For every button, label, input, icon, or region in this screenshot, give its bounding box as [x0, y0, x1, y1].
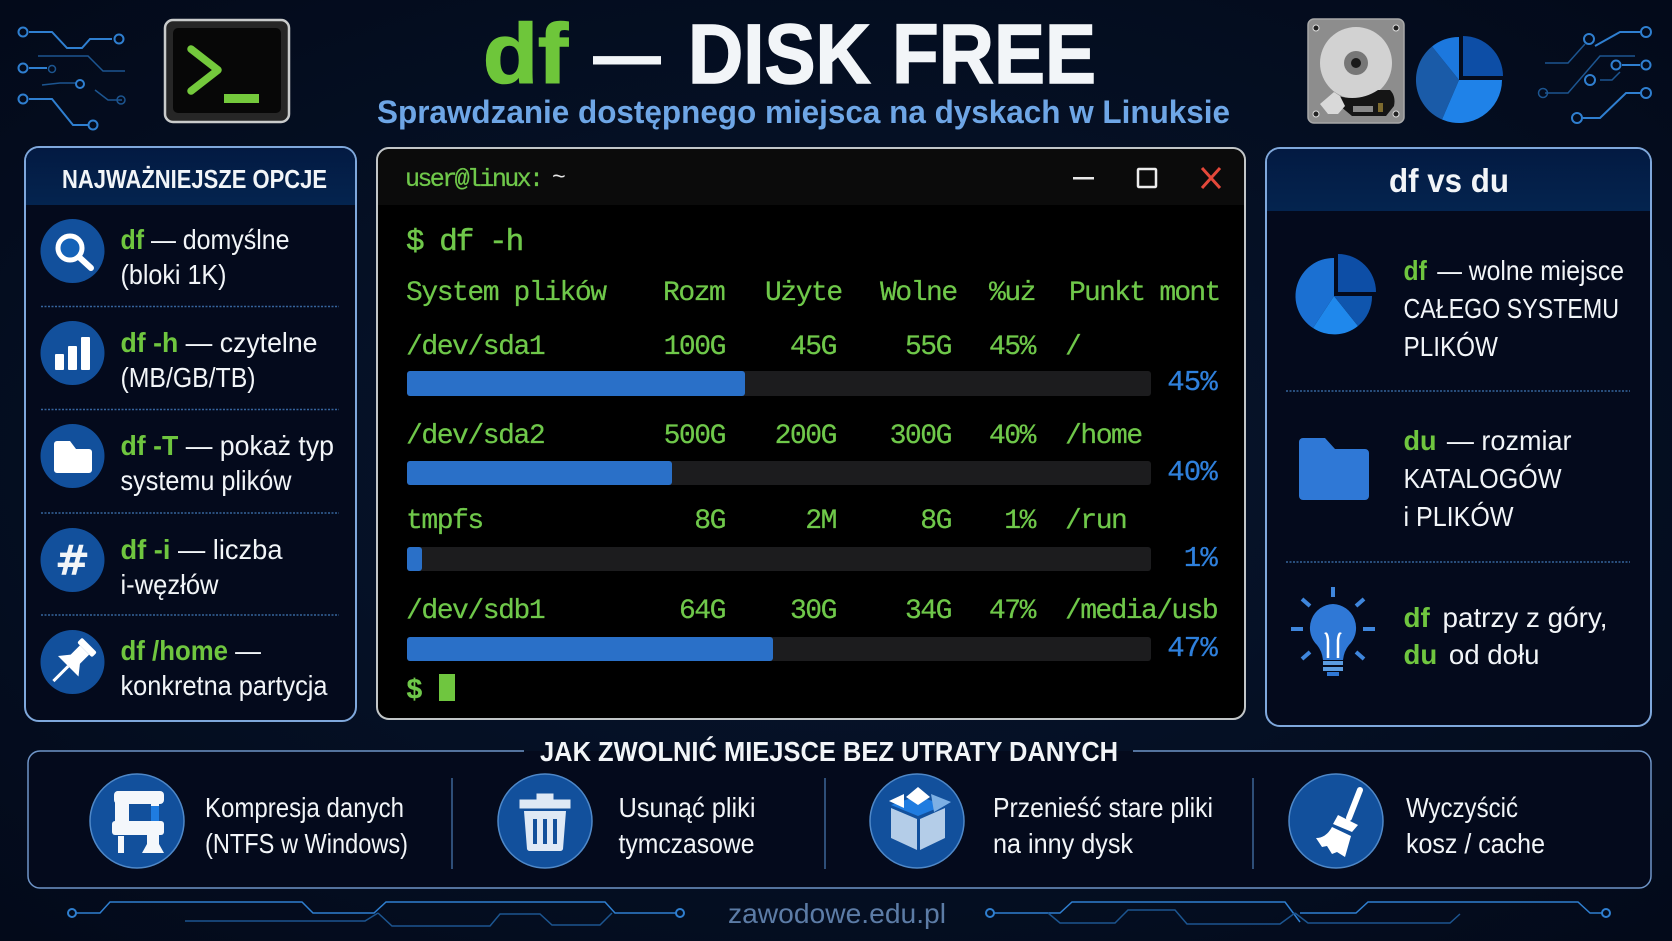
row: /dev/sda1: 45G [790, 332, 837, 363]
item: df: df — wolne miejsce [1404, 255, 1624, 286]
row: /dev/sda2 [406, 421, 1218, 489]
subtitle: Sprawdzanie dostępnego miejsca na dyskach w Linuksie [377, 94, 1230, 130]
option: df: df — domyślne [120, 224, 290, 255]
option: df -i [40, 528, 283, 600]
row: tmpfs: 1% [1184, 542, 1218, 575]
item: du: du — rozmiar [1404, 425, 1572, 456]
item: du [1299, 425, 1572, 532]
row: /dev/sda1: /dev/sda1 [406, 332, 545, 363]
row: /dev/sda1 [406, 332, 1218, 399]
prompt with cursor [406, 674, 455, 707]
panel: jak zwolnić miejsce [28, 736, 1651, 888]
table header: System plików [406, 278, 607, 309]
item: przenieść [870, 774, 1213, 868]
command: $ df -h [406, 225, 522, 260]
panel: najważniejsze opcje [25, 147, 356, 721]
option: df /home [40, 630, 328, 701]
row: /dev/sdb1 [406, 596, 1218, 665]
option: df /home: konkretna partycja [120, 670, 328, 701]
panel: df vs du [1266, 148, 1651, 726]
item: usunąć: Usunąć pliki [618, 792, 756, 823]
table header: %uż [989, 278, 1035, 309]
panel: terminal: ~ [552, 165, 565, 191]
row: tmpfs: 8G [920, 506, 952, 537]
row: /dev/sda2: 500G [664, 421, 726, 452]
item: bulb tip: df patrzy z góry, [1404, 602, 1608, 633]
icon: pie chart [1416, 36, 1503, 123]
item: df: PLIKÓW [1404, 331, 1498, 362]
option: df -i: df -i — liczba [120, 534, 283, 565]
row: tmpfs: tmpfs [406, 506, 483, 537]
option: df -T [40, 424, 334, 496]
option: df -h [40, 321, 318, 393]
row: /dev/sda2: 300G [890, 421, 952, 452]
row: /dev/sda2: 200G [775, 421, 837, 452]
terminal title: user@linux: [405, 165, 541, 194]
heading: JAK ZWOLNIĆ MIEJSCE BEZ UTRATY DANYCH [540, 736, 1118, 767]
option: df [40, 219, 290, 290]
option: df: (bloki 1K) [120, 259, 226, 290]
table header: Wolne [880, 278, 957, 309]
row: /dev/sda1: 100G [664, 332, 726, 363]
row: /dev/sdb1: /media/usb [1065, 596, 1217, 627]
circuit decoration top left [18, 28, 125, 130]
row: /dev/sda1: 45% [1167, 366, 1218, 399]
item: bulb tip: du od dołu [1404, 639, 1540, 670]
item: przenieść: Przenieść stare pliki [993, 792, 1213, 823]
row: /dev/sda2: 40% [989, 421, 1037, 452]
row: tmpfs [406, 506, 1218, 575]
row: /dev/sdb1: 47% [989, 596, 1037, 627]
row: /dev/sda1: / [1065, 332, 1081, 363]
item: bulb tip [1291, 587, 1608, 676]
item: przenieść: na inny dysk [993, 828, 1134, 859]
row: tmpfs: /run [1065, 506, 1126, 537]
row: tmpfs: 8G [694, 506, 726, 537]
row: /dev/sda2: /dev/sda2 [406, 421, 544, 452]
option: df -i: i-węzłów [120, 569, 219, 600]
row: /dev/sdb1: 30G [790, 596, 837, 627]
option: df -T: df -T — pokaż typ [120, 430, 334, 461]
title: DISK FREE [688, 7, 1096, 101]
item: wyczyścić: Wyczyścić [1406, 792, 1518, 823]
item: kompresja: (NTFS w Windows) [205, 828, 408, 859]
title: df [483, 7, 569, 101]
item: du: i PLIKÓW [1404, 501, 1514, 532]
item: kompresja [90, 774, 408, 868]
row: /dev/sdb1: 34G [905, 596, 952, 627]
row: /dev/sda1: 55G [905, 332, 952, 363]
prompt with cursor: $ [406, 676, 422, 707]
table header: Użyte [765, 278, 842, 309]
table header: Rozm [663, 278, 725, 309]
row: /dev/sda1: 45% [989, 332, 1037, 363]
item: usunąć [498, 774, 756, 868]
option: df /home: df /home — [120, 635, 261, 666]
title [483, 7, 1096, 101]
item: usunąć: tymczasowe [618, 828, 754, 859]
row: /dev/sdb1: /dev/sdb1 [406, 596, 545, 627]
row: /dev/sda2: /home [1065, 421, 1142, 452]
table header: Punkt mont [1069, 278, 1220, 309]
option: df -h: (MB/GB/TB) [120, 362, 256, 393]
row: /dev/sda2: 40% [1167, 456, 1218, 489]
panel: terminal [377, 148, 1245, 719]
item: df: CAŁEGO SYSTEMU [1404, 293, 1619, 324]
item: wyczyścić [1289, 774, 1545, 868]
circuit decoration top right [1538, 27, 1651, 123]
item: df [1295, 254, 1624, 362]
icon: hard disk [1308, 19, 1404, 123]
title: — [593, 7, 661, 101]
table header [406, 278, 1220, 309]
option: df -T: systemu plików [120, 465, 292, 496]
circuit decoration bottom left [68, 902, 684, 926]
row: /dev/sdb1: 64G [679, 596, 726, 627]
item: du: KATALOGÓW [1404, 463, 1562, 494]
row: tmpfs: 1% [1004, 506, 1037, 537]
window controls [1073, 168, 1220, 188]
heading: df vs du: df vs du [1389, 162, 1509, 199]
option: df -i: # [55, 536, 90, 585]
circuit decoration bottom right [986, 902, 1610, 924]
heading: najważniejsze opcje: NAJWAŻNIEJSZE OPCJE [62, 164, 327, 194]
item: kompresja: Kompresja danych [205, 792, 404, 823]
row: /dev/sdb1: 47% [1167, 632, 1218, 665]
row: tmpfs: 2M [805, 506, 837, 537]
icon: terminal [165, 20, 289, 122]
item: wyczyścić: kosz / cache [1406, 828, 1545, 859]
option: df -h: df -h — czytelne [120, 327, 318, 358]
footer: zawodowe.edu.pl [728, 898, 946, 929]
